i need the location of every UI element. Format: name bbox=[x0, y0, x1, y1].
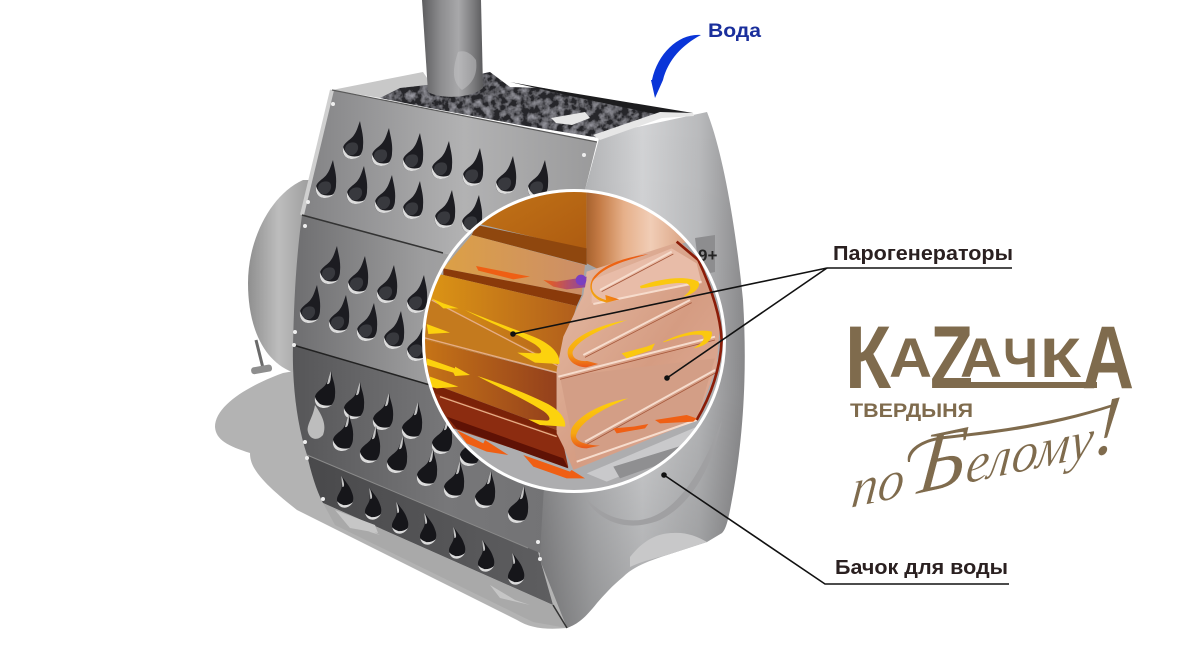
logo wordmark: А bbox=[960, 326, 1002, 389]
white rock highlight bbox=[551, 112, 590, 125]
logo wordmark: А bbox=[1082, 307, 1134, 407]
top rim back bbox=[332, 72, 432, 98]
chimney pipe bbox=[422, 0, 483, 97]
flow arrows: yellow and orange bbox=[427, 254, 712, 478]
logo wordmark bbox=[845, 307, 1134, 407]
flame holes: panel 4 bbox=[329, 474, 528, 587]
orange channel bands bbox=[413, 225, 587, 468]
model plate bbox=[695, 235, 717, 275]
logo wordmark: Ч bbox=[1003, 326, 1038, 389]
copper steam generators bbox=[557, 242, 722, 470]
callout line: water tank bbox=[661, 472, 1009, 584]
logo wordmark: Z bbox=[930, 307, 973, 407]
model plate: 9+ bbox=[698, 246, 717, 265]
door handle bbox=[251, 340, 273, 375]
water tank crescent bbox=[583, 420, 722, 526]
cutaway magnifier circle bbox=[413, 180, 733, 500]
back door cylinder bbox=[248, 180, 325, 372]
dark back edge of stone tray bbox=[510, 82, 693, 115]
perforated front panel 4 bbox=[305, 455, 553, 605]
stones bbox=[380, 72, 660, 138]
back wall left bbox=[481, 192, 587, 250]
bottom base strip bbox=[323, 503, 567, 628]
bottom arch of side panel bbox=[630, 533, 707, 567]
label: water tank: Бачок для воды bbox=[835, 557, 1008, 579]
grey metal under cutaway bbox=[586, 427, 696, 482]
perforated front panel 1 bbox=[302, 90, 597, 284]
flame holes: panel 1 bbox=[316, 121, 548, 233]
logo wordmark: А bbox=[889, 326, 932, 389]
logo subtitle: ТВЕРДЫНЯ bbox=[850, 400, 973, 422]
arrow: water inlet bbox=[651, 35, 701, 98]
label: water: Вода bbox=[708, 20, 761, 42]
logo flourish bbox=[908, 404, 1115, 462]
logo script line: по Белому! bbox=[848, 373, 1126, 527]
logo wordmark: К bbox=[1040, 326, 1082, 389]
logo: Kazachka Tverdynya po Belomu bbox=[845, 307, 1134, 527]
flame holes: panel 3 bbox=[308, 371, 528, 523]
callout line: steam generator 1 bbox=[510, 268, 827, 337]
perforated front panel 2 bbox=[293, 215, 560, 419]
perforated front panel 3 bbox=[292, 343, 548, 553]
shiny tray edge bbox=[593, 112, 694, 140]
back wall right bbox=[586, 192, 686, 268]
logo wordmark: К bbox=[845, 307, 892, 407]
label: steam generators: Парогенераторы bbox=[833, 243, 1013, 265]
silver side panel bbox=[540, 112, 745, 628]
flame holes: panel 2 bbox=[300, 246, 427, 361]
floor shadow bbox=[215, 370, 567, 629]
callout line: steam generator 2 bbox=[664, 268, 827, 381]
